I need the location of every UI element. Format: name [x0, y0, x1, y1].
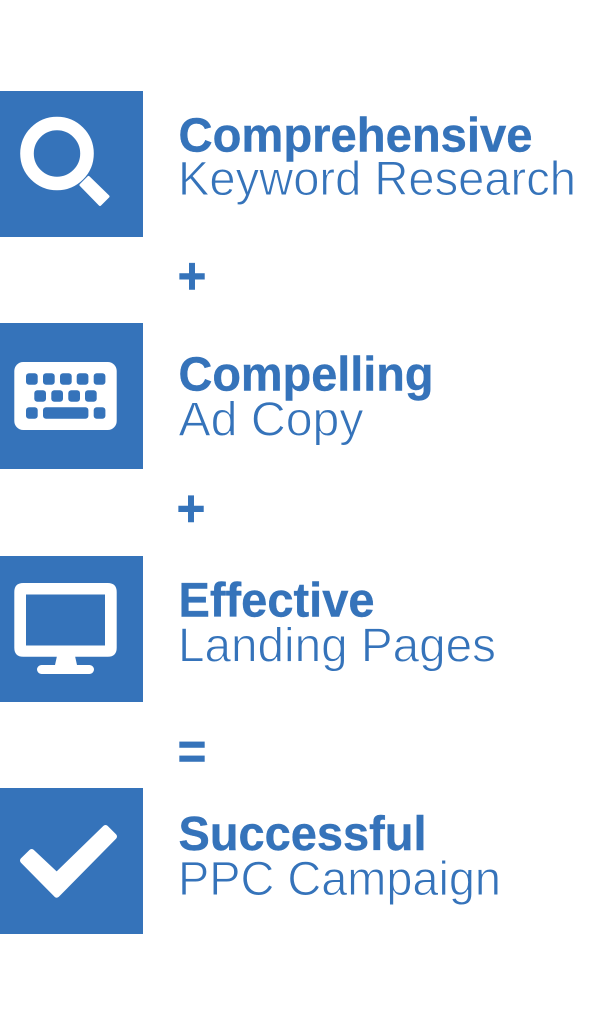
operator: equals: = — [178, 723, 206, 781]
operator: plus: + — [178, 248, 206, 306]
heading: effective landing pages — [178, 575, 496, 673]
heading: effective landing pages: Landing Pages — [178, 620, 496, 673]
heading: successful ppc campaign: PPC Campaign — [178, 853, 501, 906]
icon: desktop monitor — [0, 556, 143, 702]
icon: keyboard — [0, 323, 143, 469]
heading: compelling ad copy: Ad Copy — [178, 394, 364, 447]
panel: ppc campaign — [0, 788, 501, 934]
panel: keyword research — [0, 91, 576, 237]
heading: successful ppc campaign: Successful — [178, 808, 426, 861]
heading: compelling ad copy — [178, 349, 434, 447]
panel: landing pages — [0, 556, 496, 702]
heading: comprehensive keyword research — [178, 110, 576, 206]
heading: comprehensive keyword research: Keyword Research — [178, 153, 576, 206]
heading: comprehensive keyword research: Comprehensive — [178, 110, 532, 163]
panel: ad copy — [0, 323, 434, 469]
icon: check mark — [0, 788, 143, 934]
heading: successful ppc campaign — [178, 808, 501, 906]
heading: compelling ad copy: Compelling — [178, 349, 434, 402]
heading: effective landing pages: Effective — [178, 575, 374, 628]
operator: plus: + — [176, 480, 206, 538]
icon: magnifying glass — [0, 91, 143, 237]
